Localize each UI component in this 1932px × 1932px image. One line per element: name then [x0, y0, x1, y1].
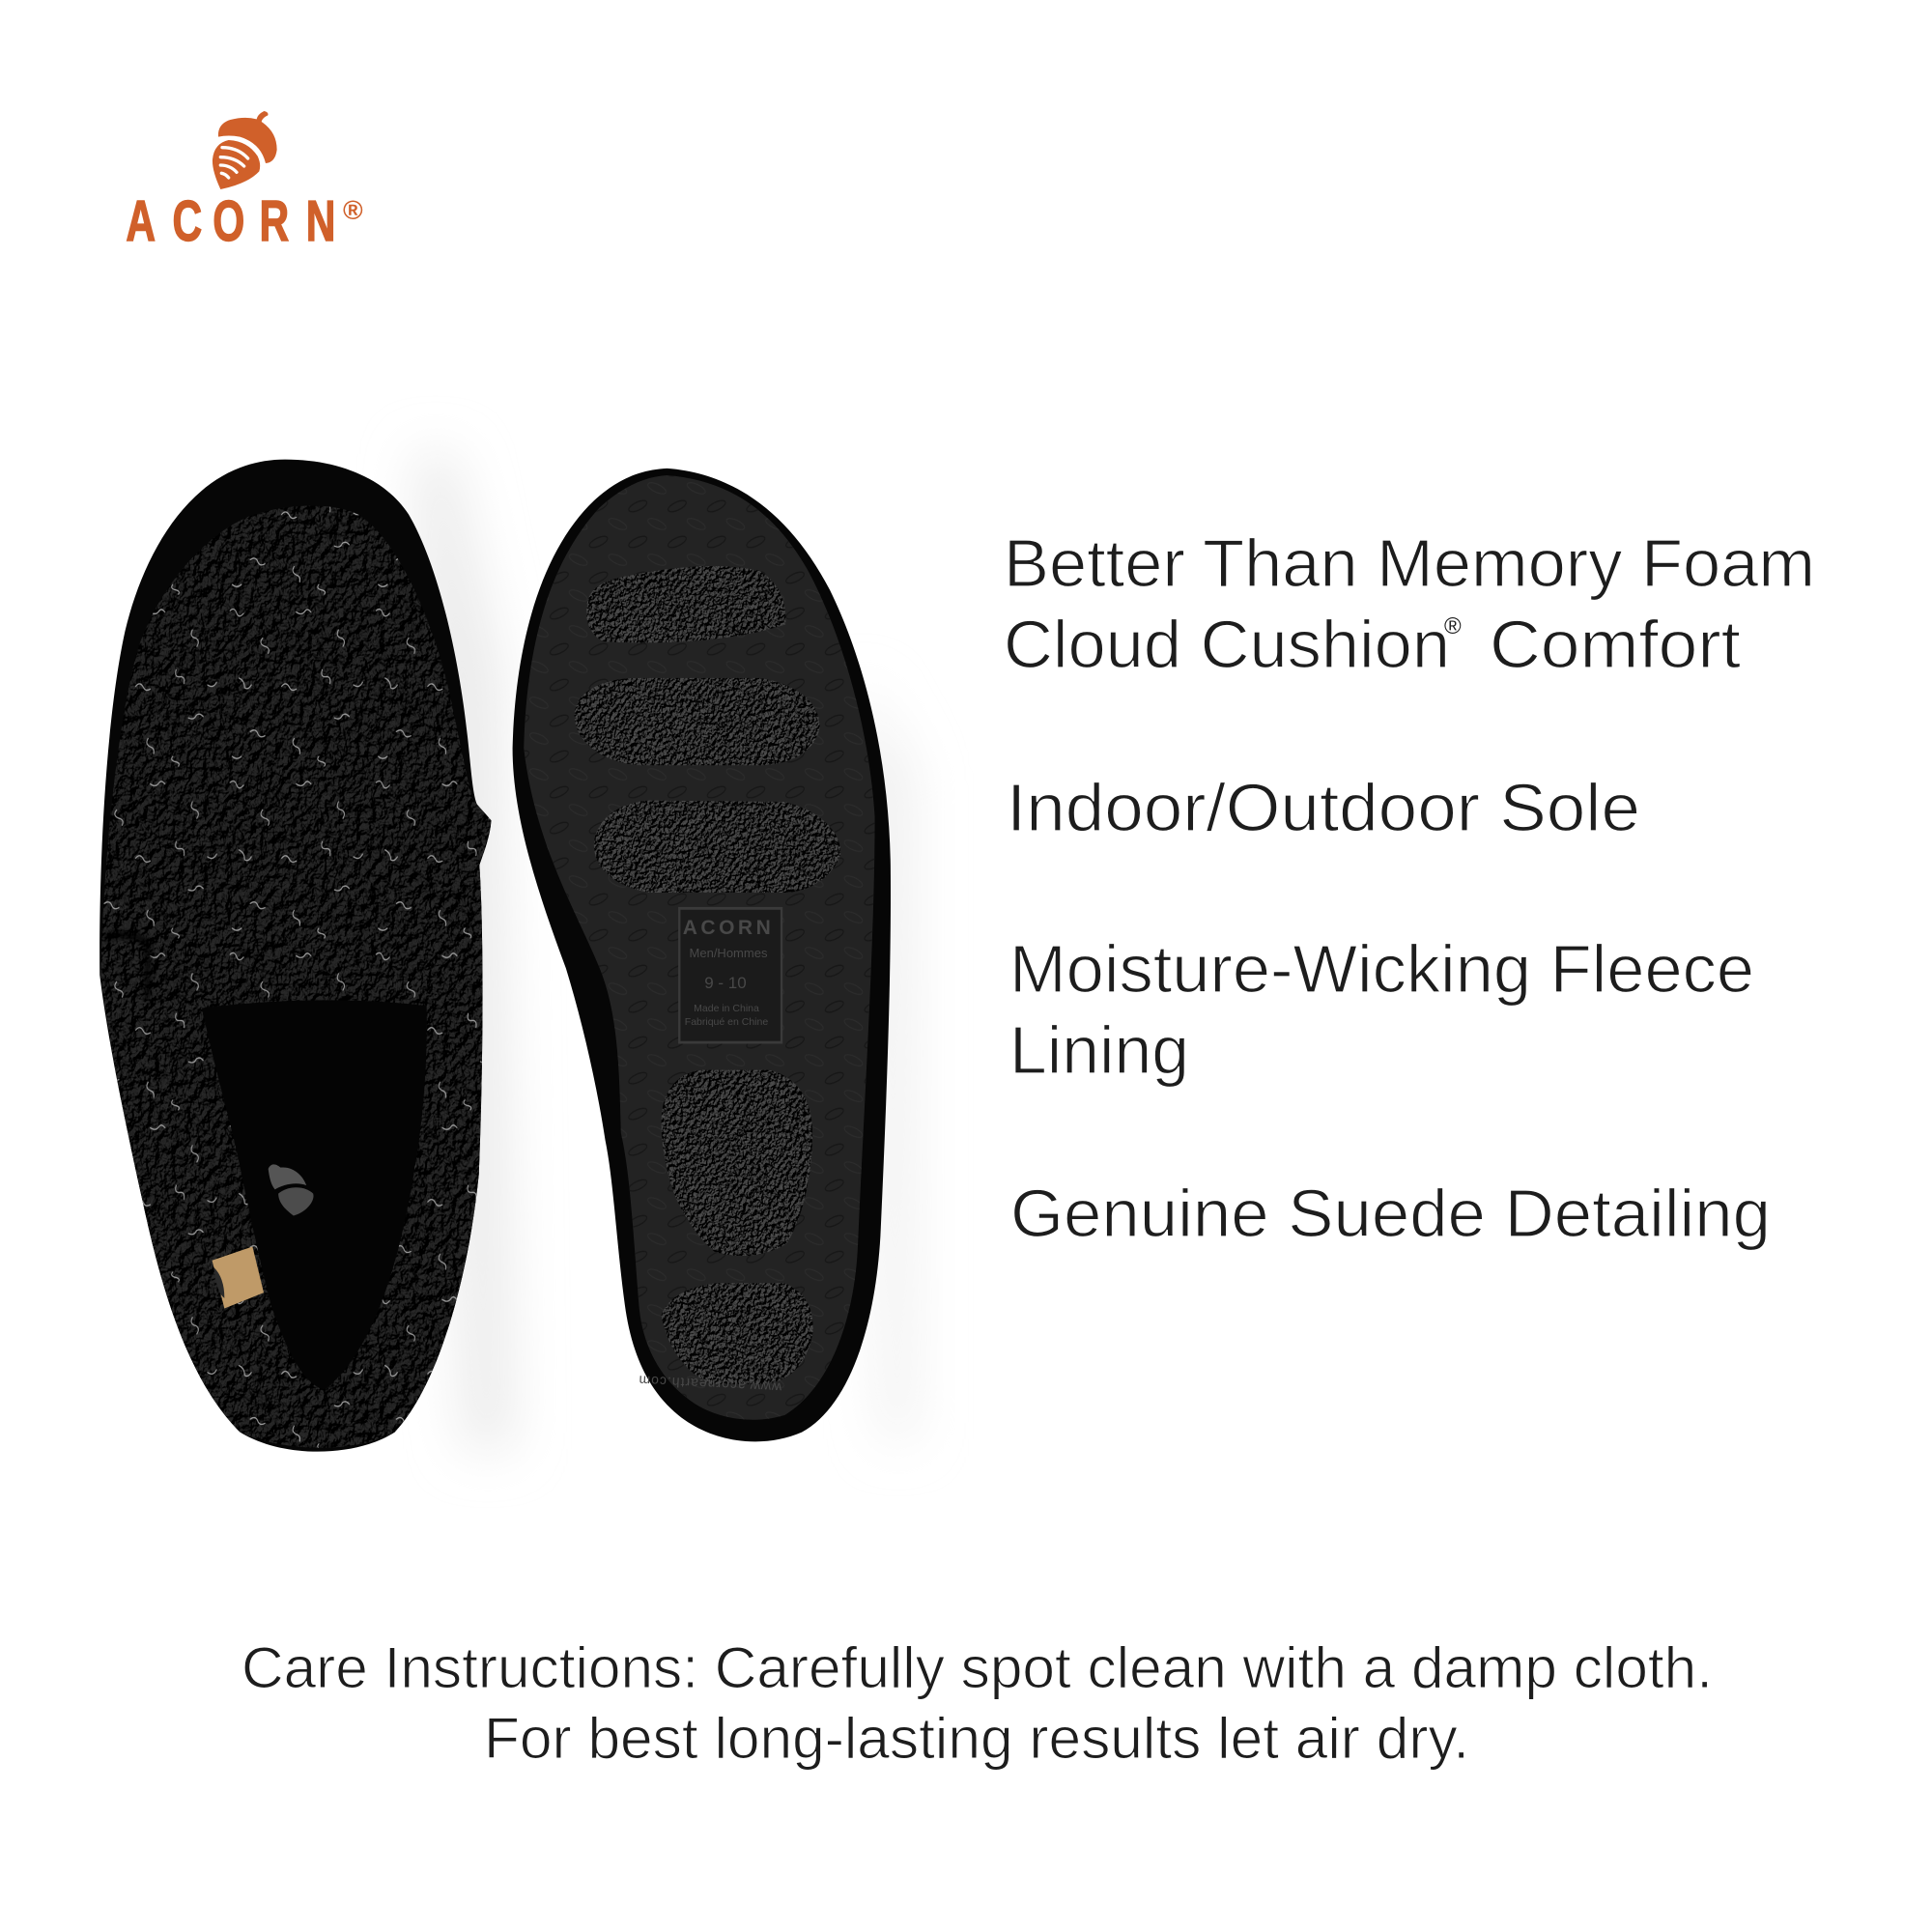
size label text — [683, 917, 774, 1028]
rubber outsole — [524, 475, 875, 1420]
icon: embroidered acorn on insole — [269, 1164, 314, 1215]
feature: sole: Indoor/Outdoor Sole — [1007, 770, 1640, 845]
feature: lining — [1009, 931, 1754, 1088]
feature: cloud cushion: Comfort — [1490, 607, 1741, 682]
size label text: Fabriqué en Chine — [685, 1016, 768, 1028]
size label text: Men/Hommes — [690, 946, 768, 960]
care instructions: Care Instructions: Carefully spot clean with a damp cloth. — [242, 1635, 1713, 1700]
outsole url text: www.acornearth.com — [638, 1373, 782, 1396]
size label text: 9 - 10 — [704, 974, 747, 992]
feature: suede: Genuine Suede Detailing — [1010, 1176, 1771, 1251]
size label text: ACORN — [683, 917, 774, 939]
feature: cloud cushion: Cloud Cushion — [1004, 607, 1450, 682]
tread pad back — [662, 1283, 813, 1384]
size label text: Made in China — [694, 1003, 759, 1014]
suede sole rim — [99, 460, 491, 1452]
feature: lining: Lining — [1009, 1012, 1189, 1088]
feature: cloud cushion: ® — [1444, 613, 1462, 639]
soft shadows behind slippers — [415, 454, 913, 1449]
care instructions — [242, 1635, 1713, 1771]
wordmark: ® — [343, 195, 363, 225]
feature list — [1004, 526, 1815, 1251]
collar fold shadow — [105, 935, 148, 999]
wordmark: ACORN — [126, 188, 335, 253]
tread pad 1 — [586, 566, 785, 642]
size label box — [679, 908, 781, 1042]
icon: acorn — [213, 111, 277, 189]
fleece upper — [100, 505, 491, 1448]
feature: cloud cushion: Better Than Memory Foam — [1004, 526, 1815, 601]
tread leaf pattern — [524, 475, 875, 1420]
feature: lining: Moisture-Wicking Fleece — [1009, 931, 1754, 1007]
suede tag — [213, 1246, 264, 1309]
tread pad 3 — [594, 801, 840, 893]
tread pad heel — [662, 1070, 812, 1256]
logo: Acorn — [126, 111, 363, 253]
feature: cloud cushion — [1004, 526, 1815, 682]
suede rim — [513, 469, 891, 1441]
slipper: top view — [99, 460, 491, 1452]
tread pads — [575, 566, 840, 1384]
insole opening — [202, 1000, 427, 1390]
care instructions: For best long-lasting results let air dry. — [484, 1706, 1469, 1771]
slipper: outsole view — [513, 469, 891, 1441]
tread pad 2 — [575, 678, 820, 765]
